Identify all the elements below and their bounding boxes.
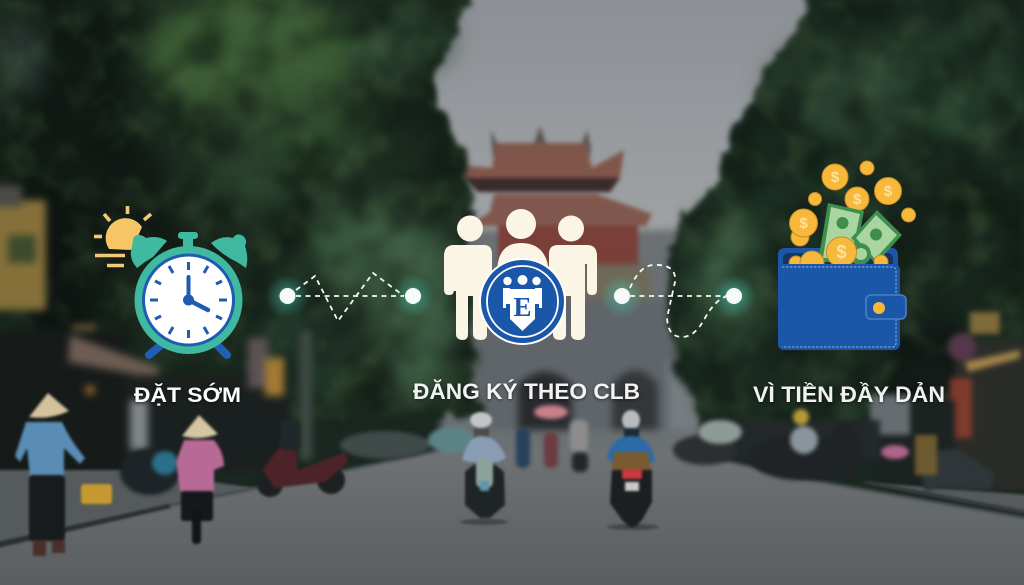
- icon: rising sun: [94, 206, 151, 266]
- left buildings: [0, 185, 312, 480]
- icon: wallet with money: [778, 161, 916, 350]
- wallet back: [778, 248, 898, 278]
- clock feet: [149, 346, 227, 355]
- clock face: [134, 246, 242, 354]
- tree canopies: [0, 0, 1024, 440]
- left sidewalk: [0, 470, 255, 544]
- icon: wallet with money: $: [836, 242, 847, 262]
- member silhouettes: [444, 209, 597, 340]
- badge: [479, 258, 566, 345]
- icon: alarm clock with sun: [94, 206, 247, 355]
- coins above wallet: $: [831, 169, 840, 186]
- coins above wallet: $: [884, 183, 893, 200]
- right buildings: [700, 312, 1024, 490]
- cyclist in pink shirt with conical hat: [176, 415, 224, 544]
- banknotes: [818, 203, 902, 265]
- label: Vì tiền đầy dản: VÌ TIỀN ĐẦY DẢN: [753, 382, 945, 407]
- coins in wallet: [789, 237, 888, 275]
- temple gate: [475, 265, 702, 430]
- sky: [0, 0, 1024, 320]
- motorbike rider centre-left: [460, 412, 508, 525]
- label: Đặt sớm: ĐẶT SỚM: [134, 382, 241, 407]
- icon: club members with badge: [444, 209, 597, 345]
- gate backdrop: [440, 230, 700, 460]
- pedestrian in blue shirt with conical hat: [15, 393, 85, 556]
- coins above wallet: $: [799, 215, 808, 232]
- coins above wallet: [790, 161, 916, 246]
- motorbike rider centre-right in blue jacket: [607, 410, 659, 530]
- right sidewalk: [860, 482, 1024, 514]
- connector: zigzag dashed link: [266, 273, 435, 321]
- scooter parked on left: [257, 420, 348, 497]
- leaf texture: [0, 0, 1024, 430]
- wallet body: [778, 264, 900, 350]
- clock bells: [131, 235, 167, 268]
- badge: E: [513, 292, 532, 322]
- label: Đăng ký theo CLB: ĐĂNG KÝ THEO CLB: [413, 379, 640, 404]
- road: [0, 450, 1024, 585]
- clock hands: [188, 277, 208, 310]
- wallet clasp: [866, 295, 906, 319]
- yellow basket: [81, 484, 112, 504]
- connector: looping dashed link: [600, 265, 756, 337]
- temple upper and lower roofs: [458, 126, 652, 268]
- coins above wallet: $: [853, 191, 862, 208]
- parked motorbikes and distant traffic: [120, 405, 995, 495]
